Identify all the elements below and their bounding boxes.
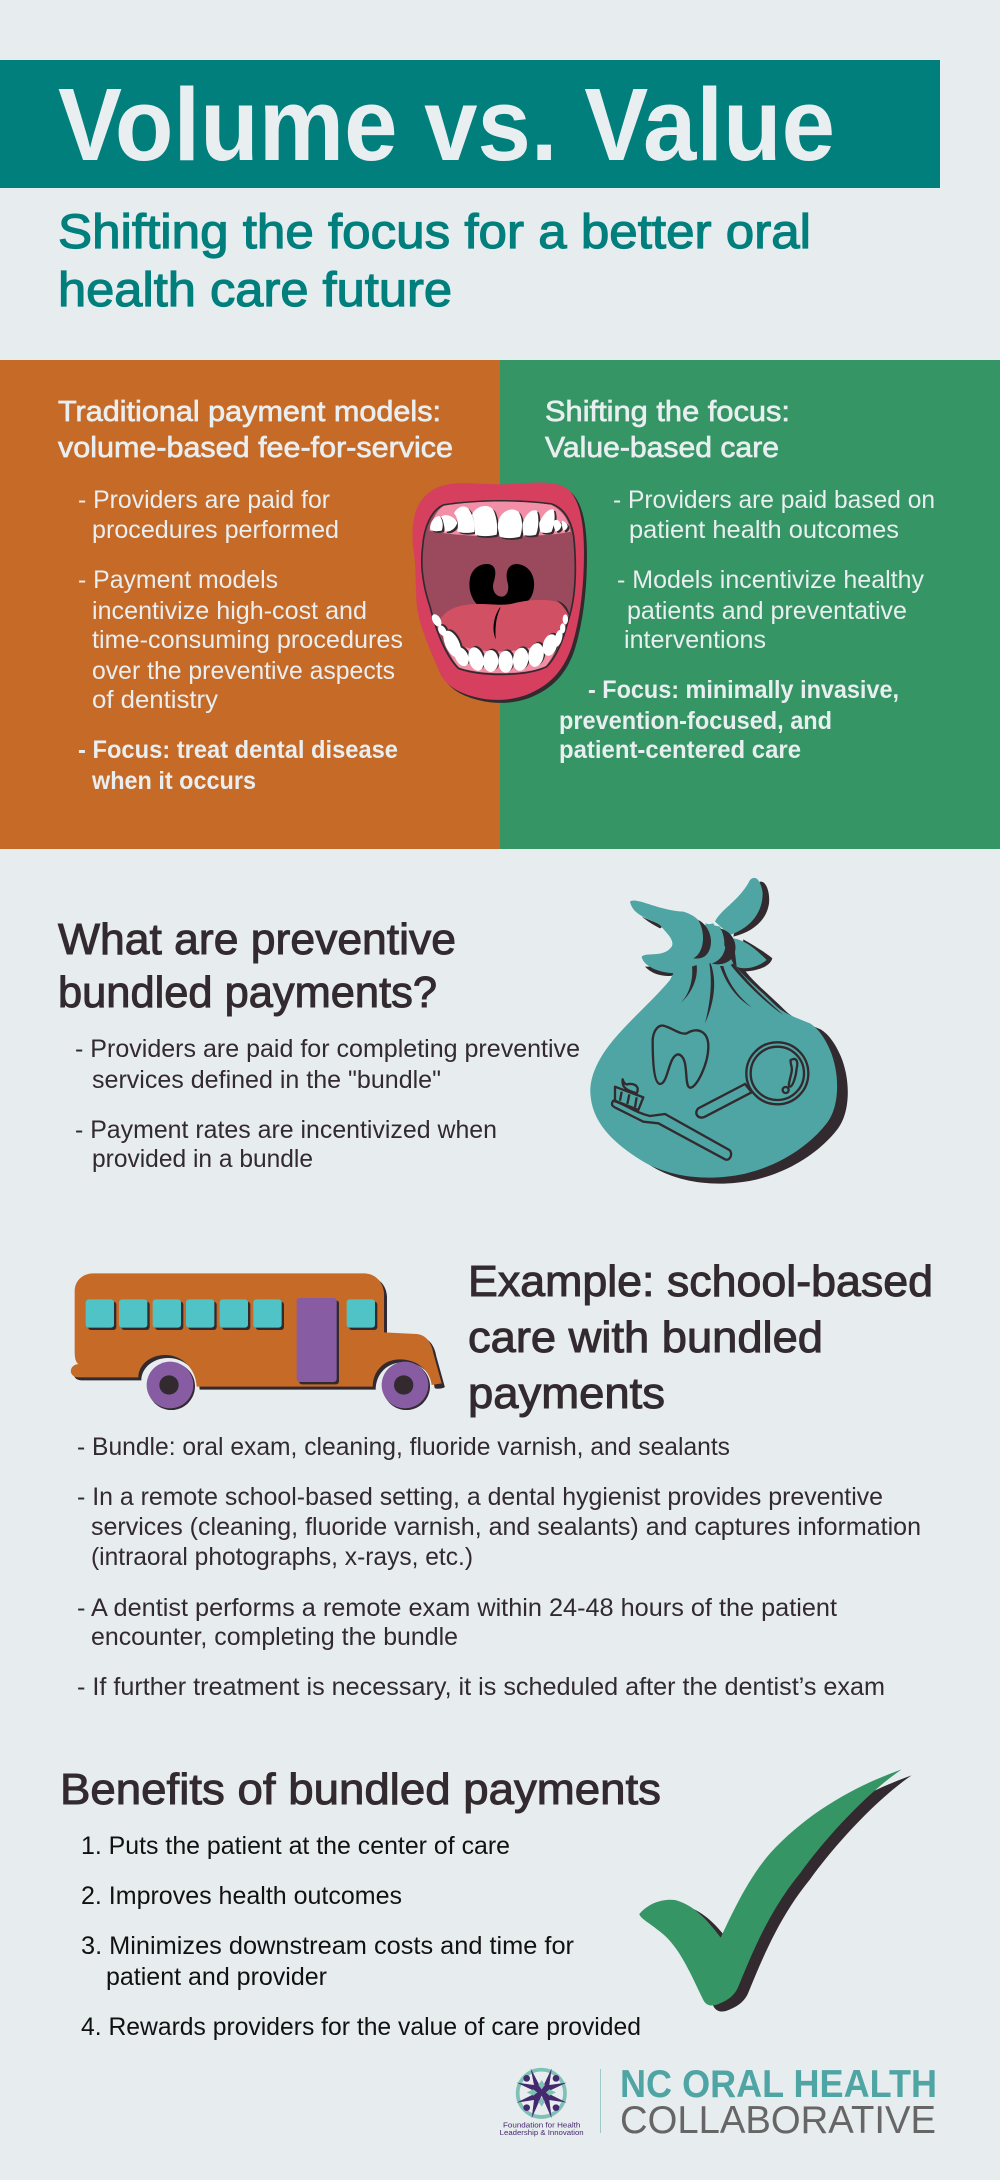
text block: traditional model bullets: time-consuming procedures — [92, 627, 403, 654]
heading: example school-based care — [468, 1257, 933, 1418]
text block: bundled payment bullets: - Payment rates are incentivized when — [75, 1117, 497, 1144]
text block: traditional model bullets: incentivize high-cost and — [92, 598, 367, 625]
panel: value-based care — [500, 360, 1000, 849]
list: benefits — [81, 1833, 641, 2041]
text block: example bullets: - If further treatment is necessary, it is scheduled after the dentist’s exam — [77, 1674, 885, 1701]
text block: traditional model bullets: of dentistry — [92, 687, 219, 714]
heading: value-based care: Value-based care — [545, 432, 779, 464]
text block: bundled payment bullets: services defined in the "bundle" — [92, 1067, 441, 1094]
heading: benefits of bundled payments: Benefits of bundled payments — [60, 1765, 661, 1814]
text block: traditional model bullets — [78, 487, 403, 795]
heading: what are preventive bundled payments: What are preventive — [58, 915, 456, 964]
title banner: Volume vs. Value — [58, 67, 835, 182]
icon: school bus — [71, 1273, 445, 1410]
icon: tied bag with dental tools — [590, 878, 848, 1184]
heading: what are preventive bundled payments — [58, 915, 456, 1017]
text block: value-based bullets: patient health outcomes — [629, 517, 899, 544]
bus door — [297, 1298, 337, 1382]
panel: traditional payment models — [0, 360, 500, 849]
logo: nc oral health collaborative — [620, 2063, 937, 2142]
logo: foundation for health leadership and innovation — [500, 2068, 584, 2137]
text block: example bullets: - In a remote school-based setting, a dental hygienist provides preventive — [77, 1484, 883, 1511]
list: benefits: 1. Puts the patient at the center of care — [81, 1833, 510, 1860]
text block: value-based bullets: - Providers are paid based on — [613, 487, 935, 514]
text block: bundled payment bullets: - Providers are paid for completing preventive — [75, 1036, 580, 1063]
icon: check mark — [639, 1769, 912, 2012]
logo: foundation for health leadership and innovation: Leadership & Innovation — [500, 2130, 584, 2137]
text block: bundled payment bullets — [75, 1036, 580, 1173]
icon: tooth outline — [653, 1026, 708, 1088]
subtitle: Shifting the focus for a better oral — [58, 206, 811, 259]
list: benefits: patient and provider — [106, 1964, 327, 1991]
text block: traditional model bullets: when it occurs — [91, 768, 256, 795]
text block: value-based bullets — [559, 487, 935, 764]
text block: value-based bullets: - Focus: minimally invasive, — [588, 677, 899, 704]
heading: traditional payment models — [58, 396, 453, 464]
text block: traditional model bullets: - Focus: treat dental disease — [78, 737, 398, 764]
text block: example bullets: (intraoral photographs, x-rays, etc.) — [91, 1544, 473, 1571]
front wheel — [382, 1362, 430, 1410]
list: benefits: 4. Rewards providers for the value of care provided — [81, 2014, 641, 2041]
logo: foundation for health leadership and innovation: Foundation for Health — [503, 2122, 580, 2129]
divider rule — [600, 2069, 601, 2133]
icon: toothbrush — [612, 1079, 731, 1160]
text block: value-based bullets: patient-centered care — [559, 737, 801, 764]
text block: example bullets: - Bundle: oral exam, cleaning, fluoride varnish, and sealants — [77, 1434, 730, 1461]
heading: example school-based care: care with bundled — [468, 1313, 823, 1362]
text block: value-based bullets: interventions — [624, 627, 766, 654]
icon: open mouth — [413, 483, 587, 703]
heading: traditional payment models: volume-based fee-for-service — [58, 432, 453, 464]
text block: traditional model bullets: - Payment models — [78, 567, 278, 594]
upper teeth — [430, 506, 570, 540]
subtitle: health care future — [58, 264, 452, 317]
heading: example school-based care: Example: school-based — [468, 1257, 933, 1306]
logo: nc oral health collaborative: COLLABORATIVE — [620, 2099, 936, 2142]
text block: traditional model bullets: over the preventive aspects — [92, 658, 395, 685]
heading: traditional payment models: Traditional payment models: — [58, 396, 441, 428]
text block: example bullets: - A dentist performs a remote exam within 24-48 hours of the patient — [77, 1595, 837, 1622]
text block: bundled payment bullets: provided in a bundle — [92, 1146, 313, 1173]
text block: example bullets — [77, 1434, 921, 1701]
heading: what are preventive bundled payments: bundled payments? — [58, 968, 437, 1017]
icon: magnifying glass — [696, 1042, 808, 1118]
list: benefits: 2. Improves health outcomes — [81, 1883, 402, 1910]
rear wheel — [147, 1362, 195, 1410]
text block: traditional model bullets: procedures performed — [92, 517, 339, 544]
text block: value-based bullets: prevention-focused, and — [559, 708, 832, 735]
bag knot and folds — [681, 920, 783, 1023]
text block: traditional model bullets: - Providers are paid for — [78, 487, 330, 514]
list: benefits: 3. Minimizes downstream costs and time for — [81, 1933, 574, 1960]
heading: value-based care — [545, 396, 790, 464]
text block: example bullets: services (cleaning, fluoride varnish, and sealants) and captures information — [91, 1514, 921, 1541]
text block: value-based bullets: patients and preventative — [627, 598, 907, 625]
text block: value-based bullets: - Models incentivize healthy — [617, 567, 925, 594]
bus windows — [86, 1299, 377, 1384]
text block: example bullets: encounter, completing the bundle — [91, 1624, 458, 1651]
lower teeth — [430, 613, 568, 673]
heading: value-based care: Shifting the focus: — [545, 396, 790, 428]
heading: example school-based care: payments — [468, 1369, 665, 1418]
subtitle — [58, 206, 811, 317]
logo: nc oral health collaborative: NC ORAL HEALTH — [620, 2063, 937, 2106]
